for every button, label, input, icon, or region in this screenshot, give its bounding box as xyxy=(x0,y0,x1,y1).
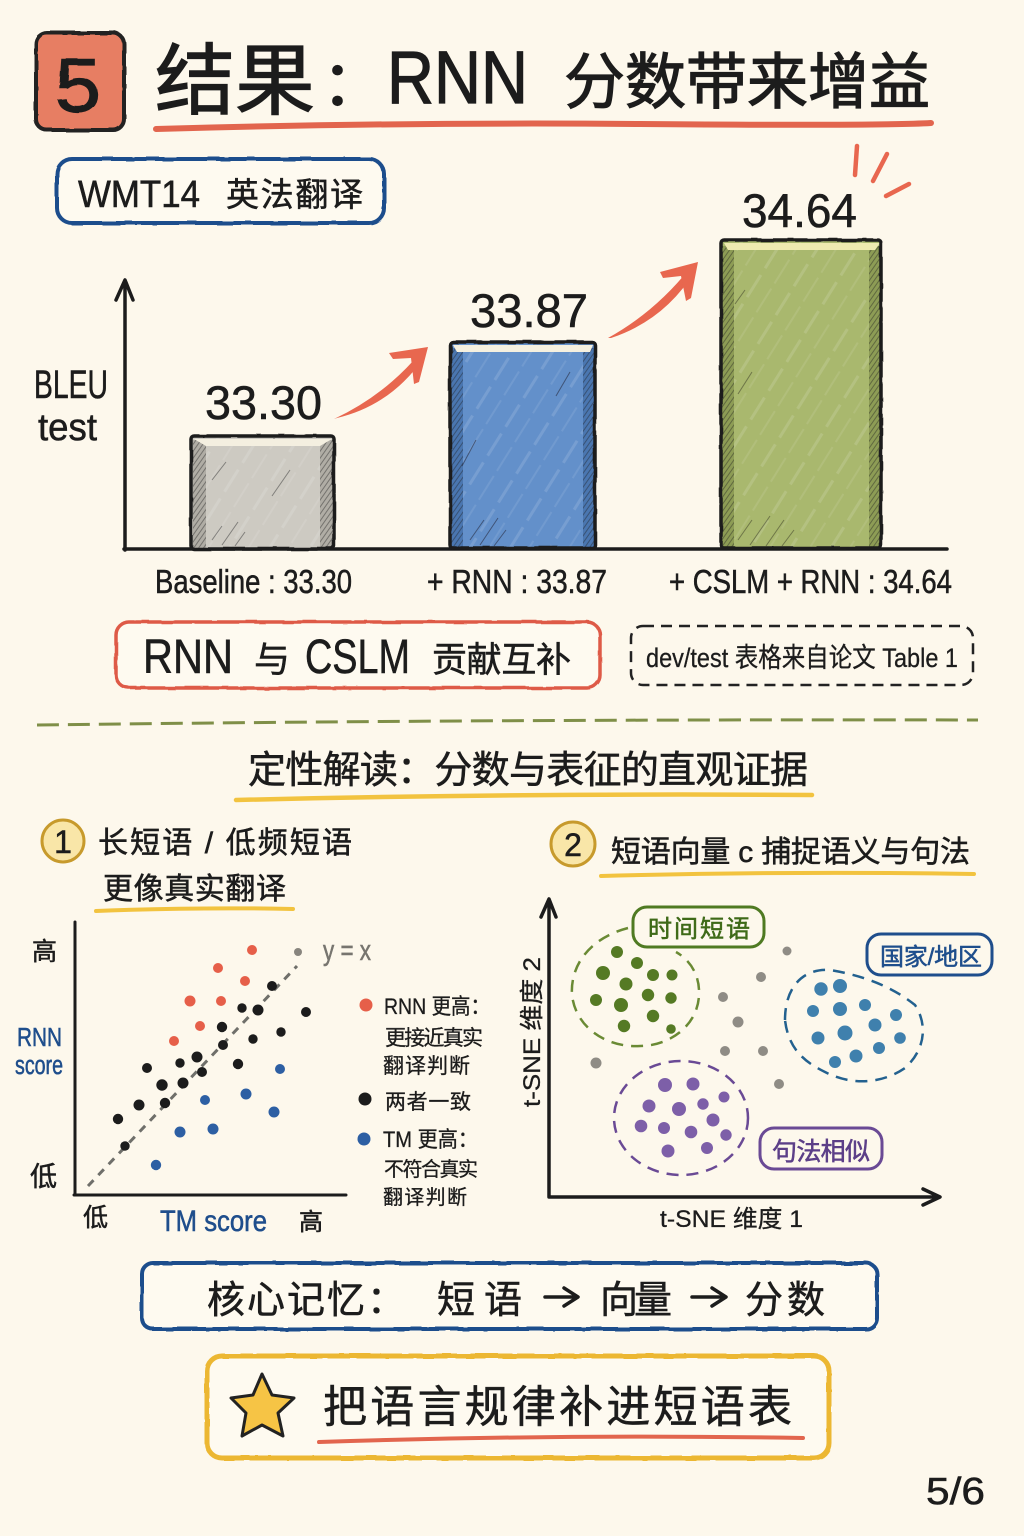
arrow: up to CSLM xyxy=(608,262,698,338)
value: 33.30: 33.30 xyxy=(205,376,322,429)
arrow xyxy=(545,1288,578,1306)
diagonal y=x: y = x xyxy=(323,935,371,967)
heading text: 结果 xyxy=(155,37,315,125)
axis labels: t-SNE 维度 2 xyxy=(519,957,546,1107)
heading text: ： xyxy=(322,50,384,119)
cluster: country: 国家/地区 xyxy=(880,944,982,971)
value: 33.87: 33.87 xyxy=(470,284,588,337)
banner: core memory: 分数 xyxy=(745,1280,825,1322)
legend: 两者一致 xyxy=(385,1091,471,1114)
tag: dataset: WMT14 xyxy=(78,174,200,216)
heading: qualitative: 定性解读：分数与表征的直观证据 xyxy=(248,750,808,792)
panel: scatter xyxy=(15,820,490,1238)
cluster: syntax xyxy=(614,1061,882,1175)
y axis label xyxy=(34,363,108,449)
icon: sparks xyxy=(855,146,909,196)
axis labels: 高 xyxy=(32,938,57,966)
panel heading: 长短语 / 低频短语 xyxy=(98,827,352,860)
callout: complementary xyxy=(116,622,600,688)
legend: 翻译判断 xyxy=(383,1186,467,1209)
heading text: 分数带来增益 xyxy=(564,48,930,116)
diagonal y=x xyxy=(88,935,371,1186)
panel heading: 更像真实翻译 xyxy=(103,873,286,906)
y axis label: BLEU xyxy=(34,363,108,407)
panel: t-SNE xyxy=(519,822,992,1233)
cluster: country xyxy=(785,934,992,1081)
axis labels: 低 xyxy=(30,1162,57,1192)
legend: 更接近真实 xyxy=(385,1027,483,1050)
callout: complementary: CSLM xyxy=(305,631,410,684)
note: source xyxy=(631,626,973,685)
banner: core memory: 短语 xyxy=(437,1280,522,1322)
badge: number 5: 5 xyxy=(55,44,101,129)
cluster: time: 时间短语 xyxy=(648,916,750,943)
banner: takeaway: 把语言规律补进短语表 xyxy=(323,1383,792,1432)
axis labels: score xyxy=(15,1050,63,1080)
panel heading: 1 xyxy=(54,824,72,860)
arrow xyxy=(692,1288,726,1306)
callout: complementary: RNN xyxy=(143,631,233,684)
heading text xyxy=(155,36,930,125)
bar: baseline xyxy=(191,436,334,549)
panel heading: 2 xyxy=(564,827,582,863)
legend: TM 更高： xyxy=(383,1127,478,1152)
panel heading: 短语向量 c 捕捉语义与句法 xyxy=(611,836,970,869)
banner: core memory: 向量 xyxy=(600,1280,672,1322)
note: source: dev/test 表格来自论文 Table 1 xyxy=(646,643,958,673)
legend: 翻译判断 xyxy=(383,1055,470,1078)
callout: complementary: 贡献互补 xyxy=(432,641,571,680)
axes xyxy=(74,922,346,1195)
dots: agree xyxy=(113,981,311,1151)
legend: RNN 更高： xyxy=(384,994,490,1019)
badge: number 5 xyxy=(36,33,124,130)
axis labels: 高 xyxy=(299,1209,323,1236)
legend xyxy=(358,994,490,1209)
cluster: syntax: 句法相似 xyxy=(772,1138,870,1166)
tag: dataset xyxy=(57,159,384,223)
axes xyxy=(116,280,947,550)
x labels: + CSLM + RNN : 34.64 xyxy=(669,563,952,600)
heading text: RNN xyxy=(387,36,528,119)
dots: noise xyxy=(590,946,792,1089)
title xyxy=(36,33,931,130)
x labels xyxy=(155,563,952,600)
arrow: up to RNN xyxy=(334,347,428,419)
panel heading xyxy=(42,820,352,911)
x labels: + RNN : 33.87 xyxy=(427,563,607,600)
axis labels xyxy=(15,938,323,1238)
axis labels xyxy=(519,957,803,1233)
y axis label: test xyxy=(38,407,97,449)
x labels: Baseline : 33.30 xyxy=(155,563,352,600)
bar: RNN xyxy=(450,342,595,548)
panel heading xyxy=(551,822,974,876)
value: 34.64: 34.64 xyxy=(742,184,857,237)
banner: core memory: 核心记忆： xyxy=(207,1280,405,1322)
axis labels: 低 xyxy=(83,1204,108,1232)
cluster: time xyxy=(572,907,764,1046)
legend: 不符合真实 xyxy=(384,1158,478,1181)
tag: dataset: 英法翻译 xyxy=(226,176,363,213)
axis labels: RNN xyxy=(17,1022,62,1052)
axes xyxy=(541,899,940,1205)
dots: RNN higher xyxy=(169,945,257,1046)
dots: TM higher xyxy=(151,1064,285,1170)
bar: CSLM + RNN xyxy=(721,240,881,548)
title underline xyxy=(156,123,931,129)
callout: complementary: 与 xyxy=(254,639,290,680)
bar chart: BLEU xyxy=(34,146,952,600)
axis labels: t-SNE 维度 1 xyxy=(660,1206,803,1233)
banner: takeaway xyxy=(207,1356,829,1458)
axis labels: TM score xyxy=(160,1205,267,1238)
page number: 5/6 xyxy=(926,1471,985,1513)
banner: core memory xyxy=(142,1263,877,1329)
icon: star xyxy=(231,1374,294,1436)
